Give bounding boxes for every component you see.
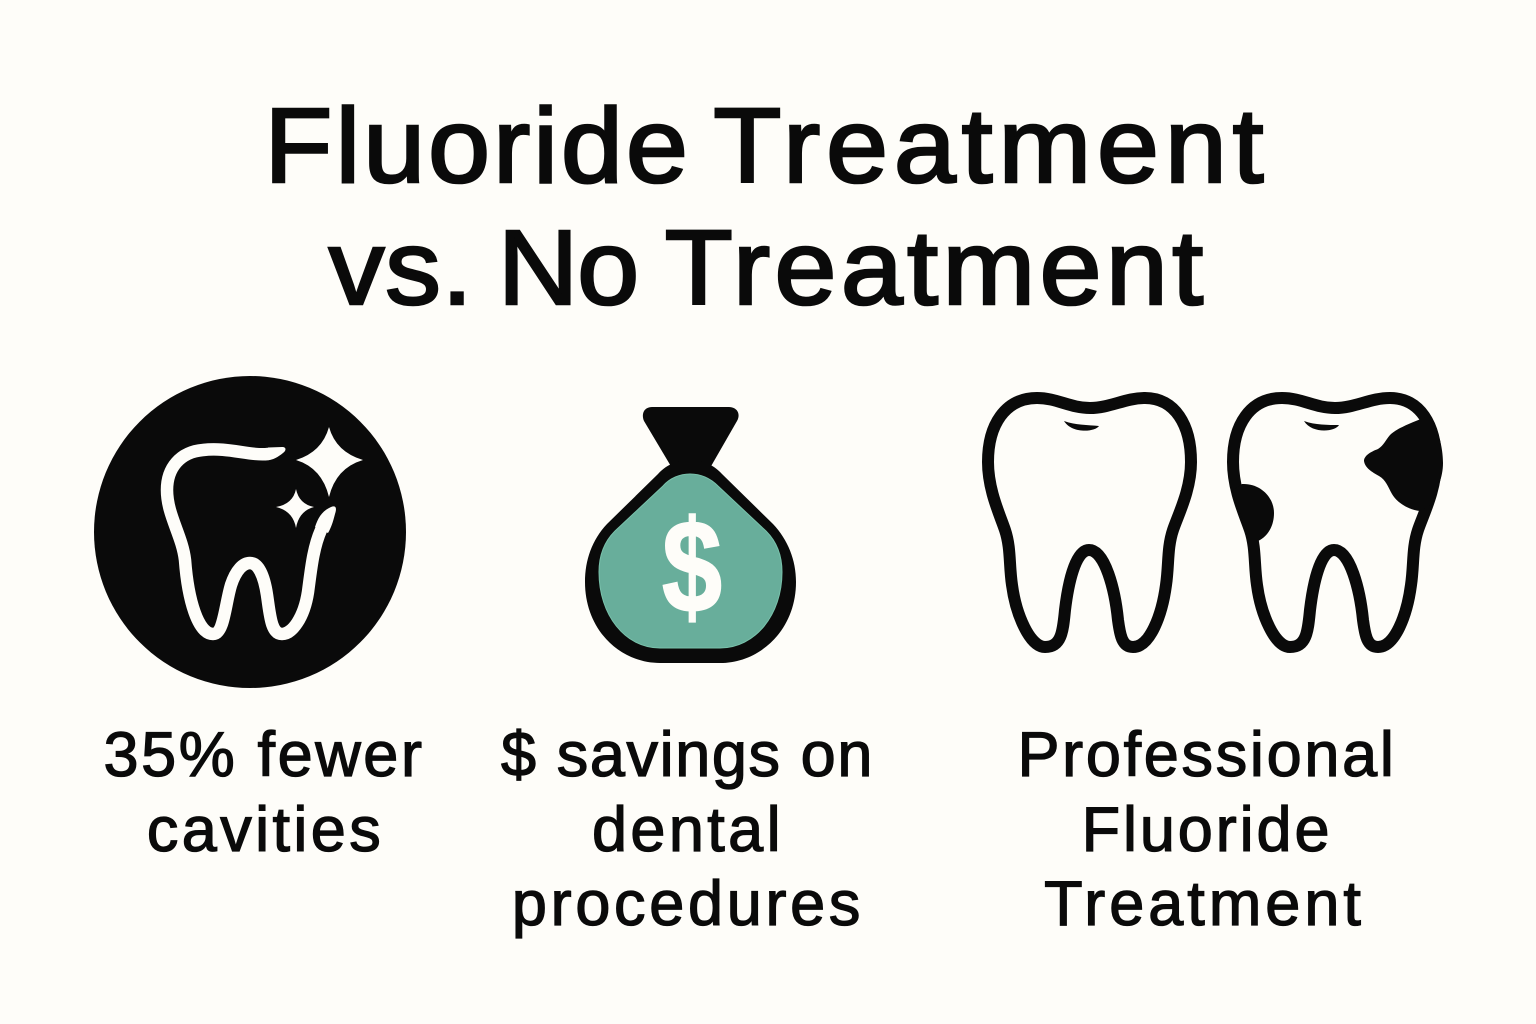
caption: savings: dental [592,794,784,864]
title: Fluoride Treatment [264,87,1269,205]
title: vs. No Treatment [329,209,1208,327]
icon: money bag with dollar sign [585,407,796,663]
caption: fewer cavities: cavities [147,794,384,864]
caption: professional fluoride treatment: Treatment [1044,869,1365,939]
caption: fewer cavities [103,720,425,864]
caption: professional fluoride treatment: Fluoride [1082,794,1332,864]
icon: money bag with dollar sign: $ [662,493,722,640]
caption: professional fluoride treatment [1017,720,1397,939]
caption: fewer cavities: 35% fewer [103,720,425,790]
icon: decayed tooth with cavities [1227,392,1443,653]
icon: healthy tooth [982,392,1197,653]
caption: professional fluoride treatment: Professional [1017,720,1397,790]
icon: tooth with sparkles in black circle [94,376,406,688]
caption: savings: $ savings on [501,720,874,790]
caption: savings: procedures [512,869,864,939]
title [264,87,1269,327]
caption: savings [500,720,874,939]
